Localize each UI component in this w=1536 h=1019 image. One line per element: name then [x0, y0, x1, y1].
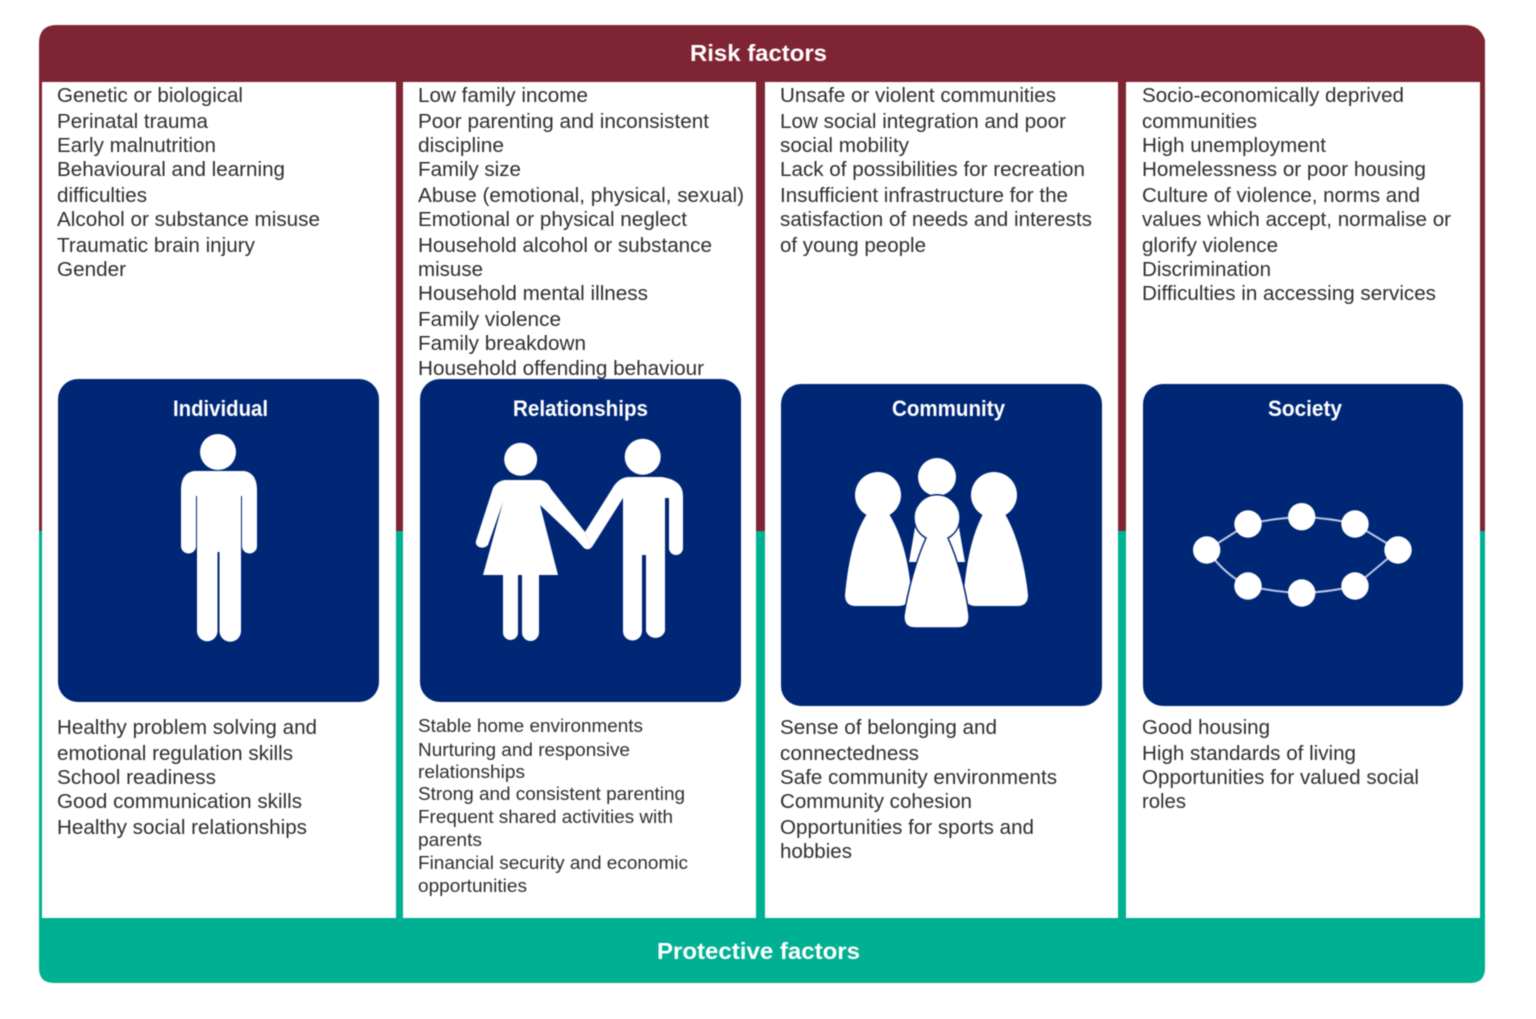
risk list: society: Homelessness or poor housing: [1142, 158, 1426, 181]
card title: individual: Individual: [173, 396, 268, 421]
protective factors heading: Protective factors: [657, 938, 860, 964]
risk list: relationships: Poor parenting and inconsistent: [418, 110, 709, 133]
protective list: society: roles: [1142, 790, 1186, 813]
icon: group of four figures: [845, 458, 1028, 628]
protective list: individual: Healthy social relationships: [57, 816, 307, 839]
risk list: community: Insufficient infrastructure for the: [780, 184, 1068, 207]
risk list: relationships: Family violence: [418, 308, 561, 331]
protective list: relationships: Frequent shared activities with: [418, 807, 673, 827]
risk factors heading: Risk factors: [690, 40, 827, 66]
risk list: society: Discrimination: [1142, 258, 1271, 281]
risk list: community: satisfaction of needs and interests: [780, 208, 1092, 231]
protective list: relationships: Financial security and economic: [418, 853, 688, 873]
icon: ring of connected nodes: [1193, 503, 1412, 607]
risk list: relationships: Family breakdown: [418, 332, 586, 355]
card: relationships: [420, 379, 741, 702]
risk list: individual: Alcohol or substance misuse: [57, 208, 320, 231]
protective list: individual: Good communication skills: [57, 790, 302, 813]
protective list: community: Sense of belonging and: [780, 716, 997, 739]
risk list: individual: Early malnutrition: [57, 134, 216, 157]
card: individual: [58, 379, 379, 702]
risk list: relationships: Household mental illness: [418, 282, 648, 305]
protective list: society: Good housing: [1142, 716, 1270, 739]
protective list: individual: emotional regulation skills: [57, 742, 293, 765]
protective list: individual: [57, 716, 317, 839]
protective list: community: hobbies: [780, 840, 852, 863]
protective list: relationships: [418, 716, 688, 896]
protective list: relationships: Strong and consistent parenting: [418, 784, 685, 804]
risk list: individual: [57, 84, 320, 281]
card: society: [1143, 384, 1463, 706]
panel: community: [765, 82, 1118, 918]
protective list: community: [780, 716, 1057, 863]
risk list: community: social mobility: [780, 134, 910, 157]
protective list: community: connectedness: [780, 742, 919, 765]
risk list: society: values which accept, normalise or: [1142, 208, 1451, 231]
risk list: community: [780, 84, 1092, 257]
risk list: society: communities: [1142, 110, 1257, 133]
risk list: individual: difficulties: [57, 184, 147, 207]
protective list: community: Opportunities for sports and: [780, 816, 1034, 839]
protective list: society: [1142, 716, 1419, 813]
protective list: society: High standards of living: [1142, 742, 1356, 765]
frame: risk half (maroon): [39, 25, 1485, 531]
risk list: relationships: Household offending behaviour: [418, 357, 704, 380]
risk list: community: Unsafe or violent communities: [780, 84, 1056, 107]
risk list: relationships: Abuse (emotional, physical, sexual): [418, 184, 744, 207]
risk list: individual: Genetic or biological: [57, 84, 243, 107]
risk list: individual: Traumatic brain injury: [57, 234, 256, 257]
risk list: relationships: Low family income: [418, 84, 588, 107]
protective list: relationships: opportunities: [418, 876, 527, 896]
risk list: community: of young people: [780, 234, 926, 257]
protective list: individual: School readiness: [57, 766, 216, 789]
protective list: society: Opportunities for valued social: [1142, 766, 1419, 789]
risk list: relationships: Household alcohol or substance: [418, 234, 712, 257]
frame: protective half (teal): [39, 531, 1485, 983]
protective list: relationships: Nurturing and responsive: [418, 740, 630, 760]
card title: relationships: Relationships: [513, 396, 648, 421]
risk list: relationships: discipline: [418, 134, 504, 157]
risk list: society: glorify violence: [1142, 234, 1278, 257]
protective list: relationships: relationships: [418, 762, 525, 782]
risk list: society: Socio-economically deprived: [1142, 84, 1404, 107]
risk list: relationships: misuse: [418, 258, 483, 281]
protective list: community: Community cohesion: [780, 790, 972, 813]
risk list: society: High unemployment: [1142, 134, 1326, 157]
risk list: individual: Behavioural and learning: [57, 158, 285, 181]
risk list: relationships: Emotional or physical neglect: [418, 208, 687, 231]
risk list: relationships: [418, 84, 744, 380]
risk list: individual: Gender: [57, 258, 126, 281]
card title: society: Society: [1268, 396, 1343, 421]
card title: community: Community: [892, 396, 1006, 421]
protective list: community: Safe community environments: [780, 766, 1057, 789]
panel: relationships: [403, 82, 756, 918]
icon: single person: [181, 434, 257, 642]
icon: couple holding hands: [476, 439, 683, 641]
panel: individual: [42, 82, 396, 918]
risk list: relationships: Family size: [418, 158, 521, 181]
risk list: individual: Perinatal trauma: [57, 110, 209, 133]
risk list: community: Lack of possibilities for recreation: [780, 158, 1085, 181]
protective list: individual: Healthy problem solving and: [57, 716, 317, 739]
risk list: society: Culture of violence, norms and: [1142, 184, 1420, 207]
risk list: society: Difficulties in accessing services: [1142, 282, 1436, 305]
protective list: relationships: Stable home environments: [418, 716, 643, 736]
risk list: society: [1142, 84, 1451, 305]
panel: society: [1126, 82, 1480, 918]
card: community: [781, 384, 1102, 706]
risk list: community: Low social integration and poor: [780, 110, 1066, 133]
protective list: relationships: parents: [418, 830, 482, 850]
